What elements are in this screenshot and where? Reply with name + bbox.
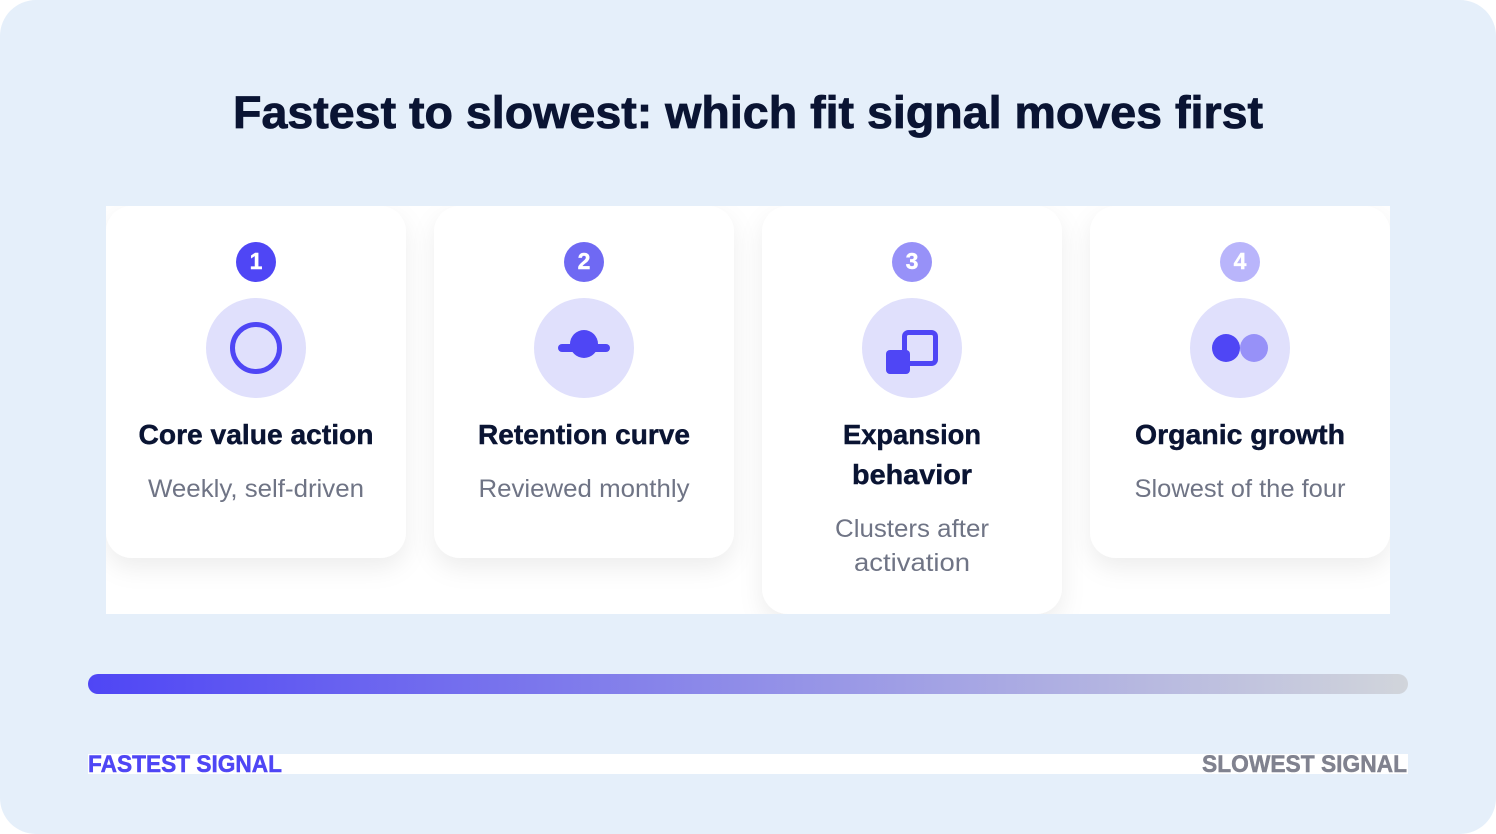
step badge 2 [564,242,604,282]
panel: retention curve [434,206,734,558]
heading: retention curve: Retention curve [478,419,690,450]
heading: expansion behavior [844,424,980,484]
panel: expansion behavior [762,206,1062,614]
step badge 3 [892,242,932,282]
speed gradient bar [88,674,1408,694]
axis labels [88,751,1408,778]
label: fastest signal: FASTEST SIGNAL [88,751,282,778]
description: clusters after activation: activation [854,549,970,577]
heading: expansion behavior: Expansion [843,419,981,450]
icon: overlapping squares [862,298,962,398]
step badge 4 [1220,242,1260,282]
title: Fastest to slowest: which fit signal moves first [233,87,1263,138]
panel: organic growth [1090,206,1390,558]
heading: expansion behavior: behavior [852,459,972,490]
panel: core value action [106,206,406,558]
heading: organic growth: Organic growth [1135,419,1345,450]
label: slowest signal: SLOWEST SIGNAL [1202,751,1407,778]
description: slowest of the four: Slowest of the four [1134,475,1346,503]
step badge 2: 2 [578,248,590,274]
step badge 3: 3 [906,248,918,274]
step badge 1: 1 [250,248,263,274]
icon: ring [206,298,306,398]
description: clusters after activation: Clusters after [835,515,989,543]
description: weekly: Weekly, self-driven [148,475,364,503]
description: reviewed monthly: Reviewed monthly [478,475,690,503]
step badge 4: 4 [1234,248,1247,274]
icon: two dots [1190,298,1290,398]
step badge 1 [236,242,276,282]
heading: core value action: Core value action [138,419,374,450]
icon: bar and dot [534,298,634,398]
card row [106,206,1390,614]
description: clusters after activation [836,519,989,571]
